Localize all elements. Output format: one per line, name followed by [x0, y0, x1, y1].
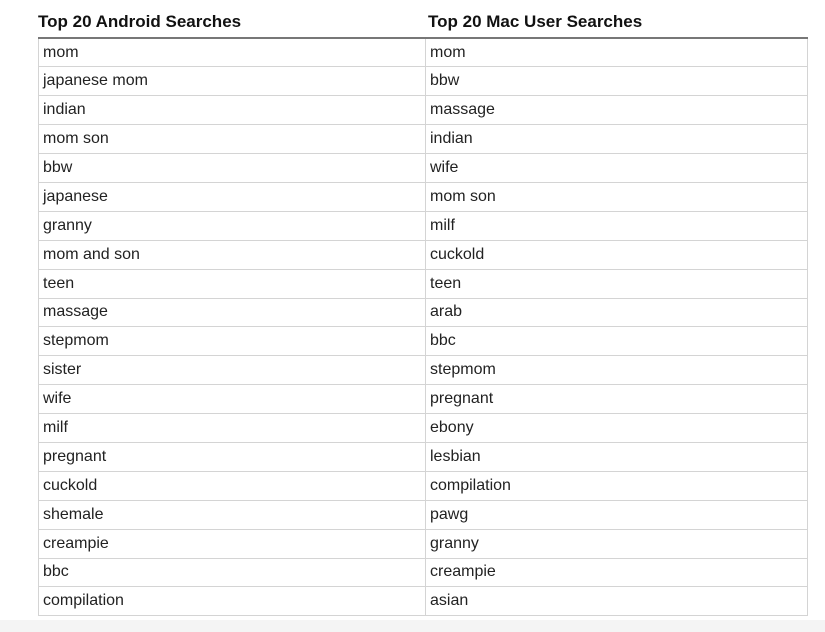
table of searches: ebony — [430, 419, 474, 436]
table of searches: granny — [43, 217, 92, 234]
heading: android: Top 20 Android Searches — [38, 12, 241, 31]
table of searches: mom and son — [43, 246, 140, 263]
table of searches: mom — [43, 44, 79, 61]
table of searches: indian — [430, 130, 473, 147]
table of searches: asian — [430, 592, 468, 609]
table of searches: mom — [430, 44, 466, 61]
table of searches: japanese mom — [43, 72, 148, 89]
table of searches: mom son — [430, 188, 496, 205]
table of searches: teen — [430, 275, 461, 292]
table of searches: milf — [43, 419, 68, 436]
table of searches: creampie — [430, 563, 496, 580]
table of searches: bbw — [43, 159, 72, 176]
table of searches: japanese — [43, 188, 108, 205]
table of searches: compilation — [43, 592, 124, 609]
table of searches: cuckold — [43, 477, 97, 494]
table of searches: compilation — [430, 477, 511, 494]
table of searches: bbc — [430, 332, 456, 349]
table of searches: pregnant — [43, 448, 106, 465]
table of searches: bbc — [43, 563, 69, 580]
table of searches: indian — [43, 101, 86, 118]
table of searches: wife — [43, 390, 71, 407]
table of searches: pregnant — [430, 390, 493, 407]
heading: mac: Top 20 Mac User Searches — [428, 12, 642, 31]
table of searches: massage — [430, 101, 495, 118]
table of searches: milf — [430, 217, 455, 234]
table of searches: stepmom — [430, 361, 496, 378]
table of searches: massage — [43, 303, 108, 320]
table of searches: lesbian — [430, 448, 481, 465]
table of searches: wife — [430, 159, 458, 176]
table of searches: creampie — [43, 535, 109, 552]
table of searches: cuckold — [430, 246, 484, 263]
table of searches: sister — [43, 361, 81, 378]
table of searches: stepmom — [43, 332, 109, 349]
table of searches: arab — [430, 303, 462, 320]
table of searches: granny — [430, 535, 479, 552]
table of searches: shemale — [43, 506, 103, 523]
table of searches: bbw — [430, 72, 459, 89]
table of searches: pawg — [430, 506, 468, 523]
table of searches: teen — [43, 275, 74, 292]
table of searches: mom son — [43, 130, 109, 147]
